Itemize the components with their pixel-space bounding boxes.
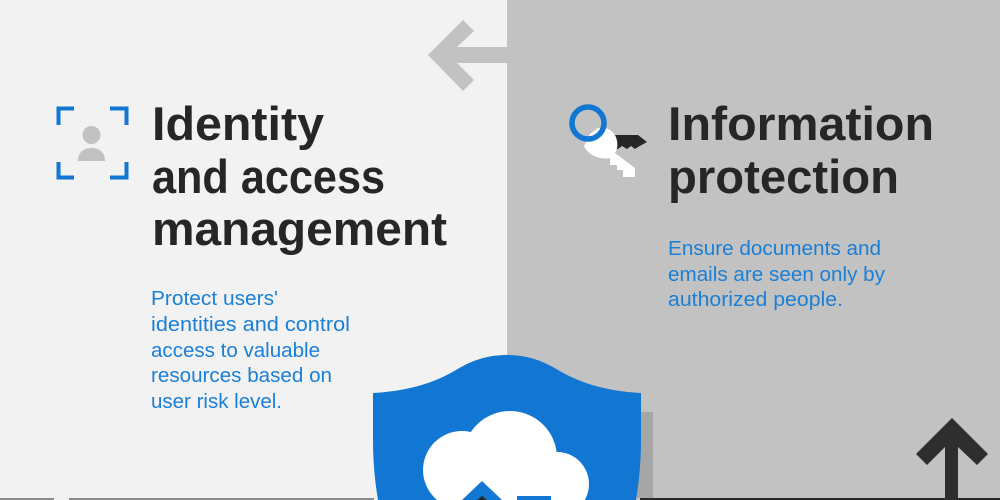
key white bow and blade xyxy=(584,128,635,177)
panel: identity and access management xyxy=(0,0,507,500)
arrow: up xyxy=(916,418,988,500)
text block: information protection description: authorized people. xyxy=(668,289,843,311)
bottom edge strip xyxy=(0,498,1000,500)
text block: identity description: user risk level. xyxy=(151,391,282,413)
text block: information protection description xyxy=(668,238,885,311)
text block: identity description: Protect users' xyxy=(151,288,278,310)
download bar xyxy=(517,496,551,500)
icon: blue corner brackets xyxy=(58,108,126,178)
key ring xyxy=(572,107,604,139)
text block: information protection description: Ensure documents and xyxy=(668,238,881,260)
key dark blade xyxy=(615,135,647,149)
icon: user silhouette xyxy=(78,126,105,161)
heading: information protection: Information xyxy=(668,97,934,150)
heading: information protection xyxy=(668,97,934,203)
heading: identity and access management: management xyxy=(152,202,447,255)
heading: identity and access management xyxy=(152,97,447,255)
heading: identity and access management: Identity xyxy=(152,97,324,150)
text block: identity description: access to valuable xyxy=(151,340,320,362)
shield xyxy=(373,355,641,500)
heading: information protection: protection xyxy=(668,150,899,203)
text block: information protection description: emails are seen only by xyxy=(668,264,885,286)
icon: key xyxy=(572,107,647,177)
text block: identity description: resources based on xyxy=(151,365,332,387)
icon: identity frame with user xyxy=(58,108,126,178)
text block: identity description: identities and control xyxy=(151,314,350,336)
panel: information protection xyxy=(507,0,1000,500)
upload arrow xyxy=(462,481,502,500)
heading: identity and access management: and access xyxy=(152,150,385,203)
arrow: left xyxy=(428,20,508,91)
shield shadow xyxy=(630,412,653,498)
cloud xyxy=(423,411,589,500)
text block: identity description xyxy=(151,288,350,413)
arrow centre xyxy=(477,496,487,500)
icon: shield with cloud xyxy=(373,355,641,500)
